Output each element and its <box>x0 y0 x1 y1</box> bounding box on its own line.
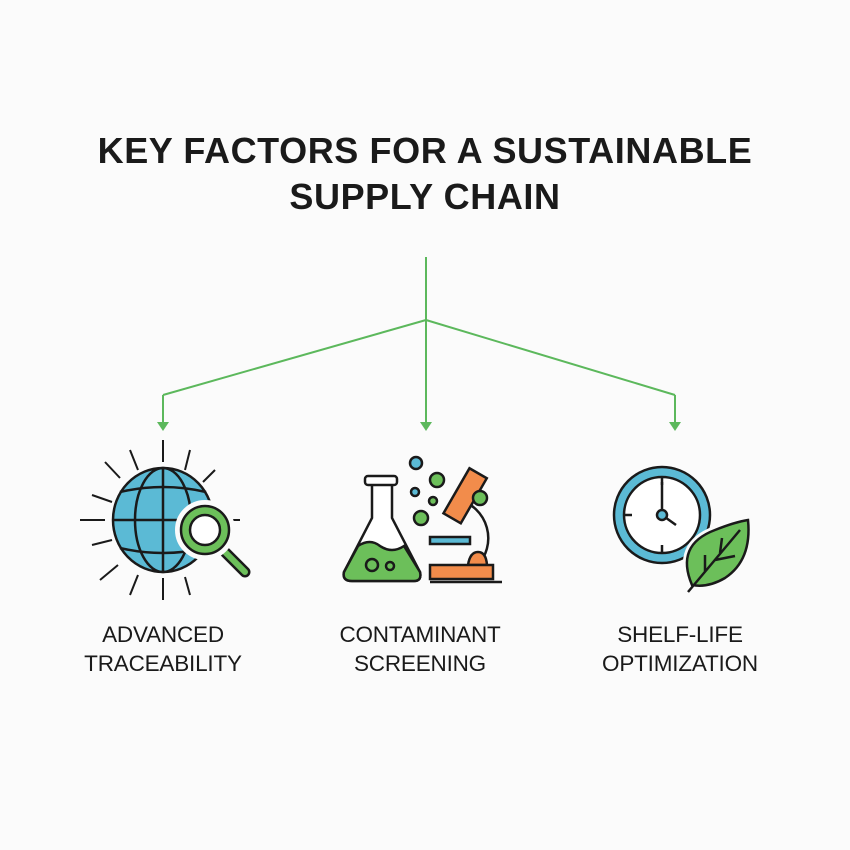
label: shelf-life optimization: SHELF-LIFE <box>617 622 743 647</box>
icon: globe with magnifier <box>80 440 245 600</box>
title: SUPPLY CHAIN <box>289 176 561 217</box>
label: shelf-life optimization: OPTIMIZATION <box>602 651 758 676</box>
label: contaminant screening: SCREENING <box>354 651 486 676</box>
label: contaminant screening <box>339 622 501 676</box>
icon: clock with leaf <box>614 467 749 592</box>
label: advanced traceability: ADVANCED <box>102 622 224 647</box>
title <box>98 130 752 217</box>
label: shelf-life optimization <box>602 622 758 676</box>
label: advanced traceability <box>84 622 242 676</box>
label: contaminant screening: CONTAMINANT <box>339 622 501 647</box>
title: KEY FACTORS FOR A SUSTAINABLE <box>98 130 752 171</box>
icon: flask and microscope <box>344 457 502 582</box>
label: advanced traceability: TRACEABILITY <box>84 651 242 676</box>
